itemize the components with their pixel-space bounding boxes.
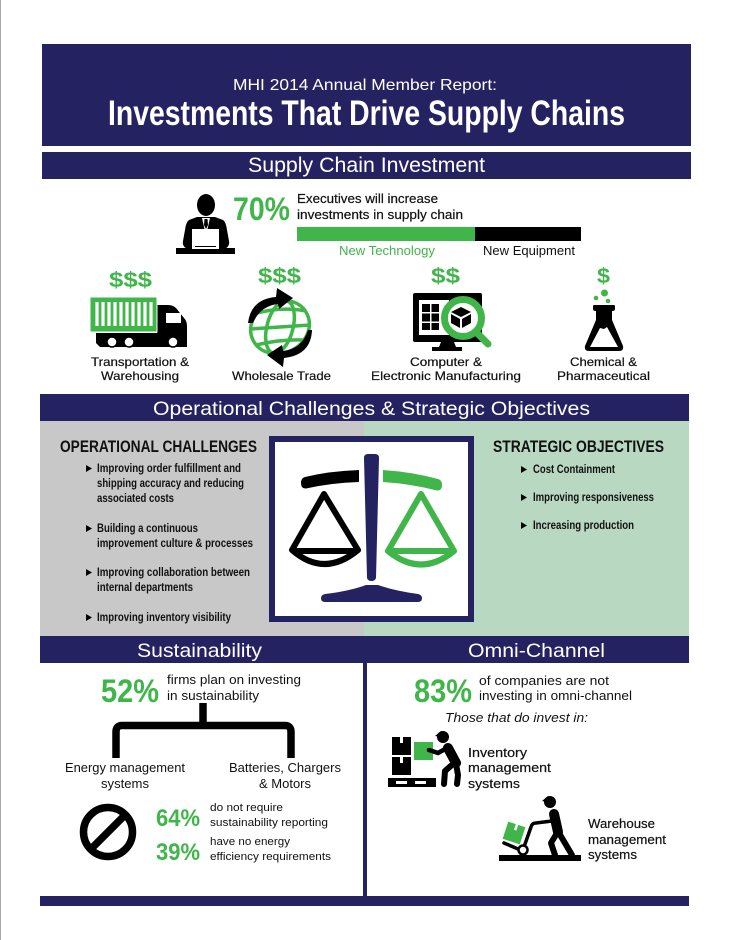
sector: chemical and pharmaceutical [557, 265, 650, 383]
label: energy management systems [65, 761, 186, 791]
label: warehouse management systems: Warehouse [588, 817, 655, 831]
icon: truck [90, 297, 187, 347]
report subtitle: MHI 2014 Annual Member Report: [233, 77, 497, 94]
stat: 64 percent no reporting: do not require [210, 802, 283, 814]
panel: operational challenges: Improving inventory visibility [97, 612, 231, 624]
panel: operational challenges: Improving collaboration between [97, 567, 250, 579]
section heading: sustainability: Sustainability [137, 640, 262, 662]
stat: 39 percent no efficiency requirements [156, 836, 332, 866]
panel: operational challenges: improvement culture & processes [97, 538, 253, 550]
stat: 70 percent executives: 70% [233, 191, 290, 227]
sector: transportation and warehousing: $$$ [109, 269, 152, 292]
split bar: new technology vs new equipment [297, 227, 581, 258]
panel: operational challenges: internal departments [97, 582, 193, 594]
stat: 64 percent no reporting [156, 802, 328, 832]
icon: balance scale [272, 439, 471, 619]
label: inventory management systems: Inventory [468, 746, 528, 760]
panel: operational challenges: Building a continuous [97, 523, 198, 535]
sector: transportation and warehousing [90, 269, 189, 383]
bracket: sustainability investments [116, 703, 291, 758]
stat: 52 percent sustainability [101, 673, 301, 709]
stat: 70 percent executives: Executives will increase [297, 192, 438, 206]
stat: 52 percent sustainability: 52% [101, 673, 159, 709]
title banner [42, 44, 691, 146]
stat: 83 percent not investing in omni-channel: investing in omni-channel [479, 689, 632, 703]
sector: wholesale trade: $$$ [258, 265, 301, 288]
panel: strategic objectives: Cost Containment [533, 464, 615, 476]
panel: strategic objectives [364, 421, 689, 636]
main title: Investments That Drive Supply Chains [108, 94, 625, 133]
label: warehouse management systems: systems [588, 848, 637, 862]
section heading: supply chain investment [42, 152, 691, 179]
sector: chemical and pharmaceutical: Pharmaceutical [557, 369, 650, 383]
stat: 39 percent no efficiency requirements: efficiency requirements [210, 851, 332, 863]
icon: worker stacking boxes [388, 731, 458, 787]
stat: 64 percent no reporting: 64% [156, 805, 200, 832]
section heading: omni-channel [363, 636, 689, 663]
sector: wholesale trade [232, 265, 331, 383]
label: inventory management systems [468, 746, 552, 791]
label: warehouse management systems: management [588, 833, 667, 847]
stat: 83 percent not investing in omni-channel [414, 673, 632, 709]
panel: strategic objectives: Improving responsiveness [533, 492, 654, 504]
stat: 70 percent executives: investments in supply chain [297, 208, 463, 222]
label: batteries, chargers and motors: Batteries, Chargers [229, 761, 341, 775]
label: batteries, chargers and motors: & Motors [259, 777, 311, 791]
split bar: new technology vs new equipment: New Equipment [483, 244, 576, 258]
sector: computer and electronic manufacturing [371, 265, 521, 383]
icon: globe with arrows [242, 288, 318, 367]
panel: operational challenges: associated costs [97, 493, 174, 505]
label: batteries, chargers and motors [229, 761, 341, 791]
label: inventory management systems: management [468, 761, 552, 775]
stat: 83 percent not investing in omni-channel: of companies are not [479, 674, 610, 688]
sector: computer and electronic manufacturing: Electronic Manufacturing [371, 369, 521, 383]
panel: operational challenges: OPERATIONAL CHALLENGES [60, 437, 257, 456]
panel: operational challenges [40, 421, 364, 636]
sector: chemical and pharmaceutical: Chemical & [570, 355, 637, 369]
panel: operational challenges: Improving order fulfillment and [97, 463, 241, 475]
panel: strategic objectives: STRATEGIC OBJECTIVES [493, 437, 664, 456]
stat: 39 percent no efficiency requirements: have no energy [210, 836, 291, 848]
icon: flask with bubbles [585, 290, 623, 351]
sector: wholesale trade: Wholesale Trade [232, 369, 331, 383]
stat: 70 percent executives [233, 191, 463, 227]
section heading: sustainability [40, 636, 363, 663]
label: energy management systems: Energy management [65, 761, 186, 775]
label: energy management systems: systems [101, 777, 149, 791]
panel: strategic objectives: Increasing production [533, 520, 634, 532]
section heading: omni-channel: Omni-Channel [468, 640, 605, 662]
stat: 83 percent not investing in omni-channel: 83% [414, 673, 472, 709]
stat: 39 percent no efficiency requirements: 39% [156, 839, 200, 866]
icon: monitor with magnifier [413, 293, 488, 351]
icon: executive at laptop [176, 194, 235, 254]
stat: 64 percent no reporting: sustainability reporting [210, 817, 328, 829]
sector: computer and electronic manufacturing: Computer & [410, 355, 482, 369]
section heading: operational challenges and strategic objectives [40, 394, 689, 421]
split bar: new technology vs new equipment: New Technology [339, 244, 436, 258]
sector: transportation and warehousing: Warehousing [101, 369, 179, 383]
stat: 52 percent sustainability: firms plan on investing [167, 673, 301, 687]
section heading: operational challenges and strategic objectives: Operational Challenges & Strategic Objectives [153, 398, 590, 420]
label: inventory management systems: systems [468, 777, 520, 791]
label: warehouse management systems [588, 817, 667, 862]
sector: computer and electronic manufacturing: $$ [431, 265, 460, 288]
sector: transportation and warehousing: Transportation & [91, 355, 189, 369]
icon: prohibited sign [84, 808, 132, 856]
stat: 52 percent sustainability: in sustainability [167, 689, 260, 703]
sector: chemical and pharmaceutical: $ [597, 265, 610, 288]
panel: operational challenges: shipping accuracy and reducing [97, 478, 244, 490]
section heading: supply chain investment: Supply Chain Investment [248, 154, 485, 177]
icon: worker pushing hand truck [499, 796, 581, 861]
subheading: those that do invest: Those that do invest in: [445, 711, 588, 725]
